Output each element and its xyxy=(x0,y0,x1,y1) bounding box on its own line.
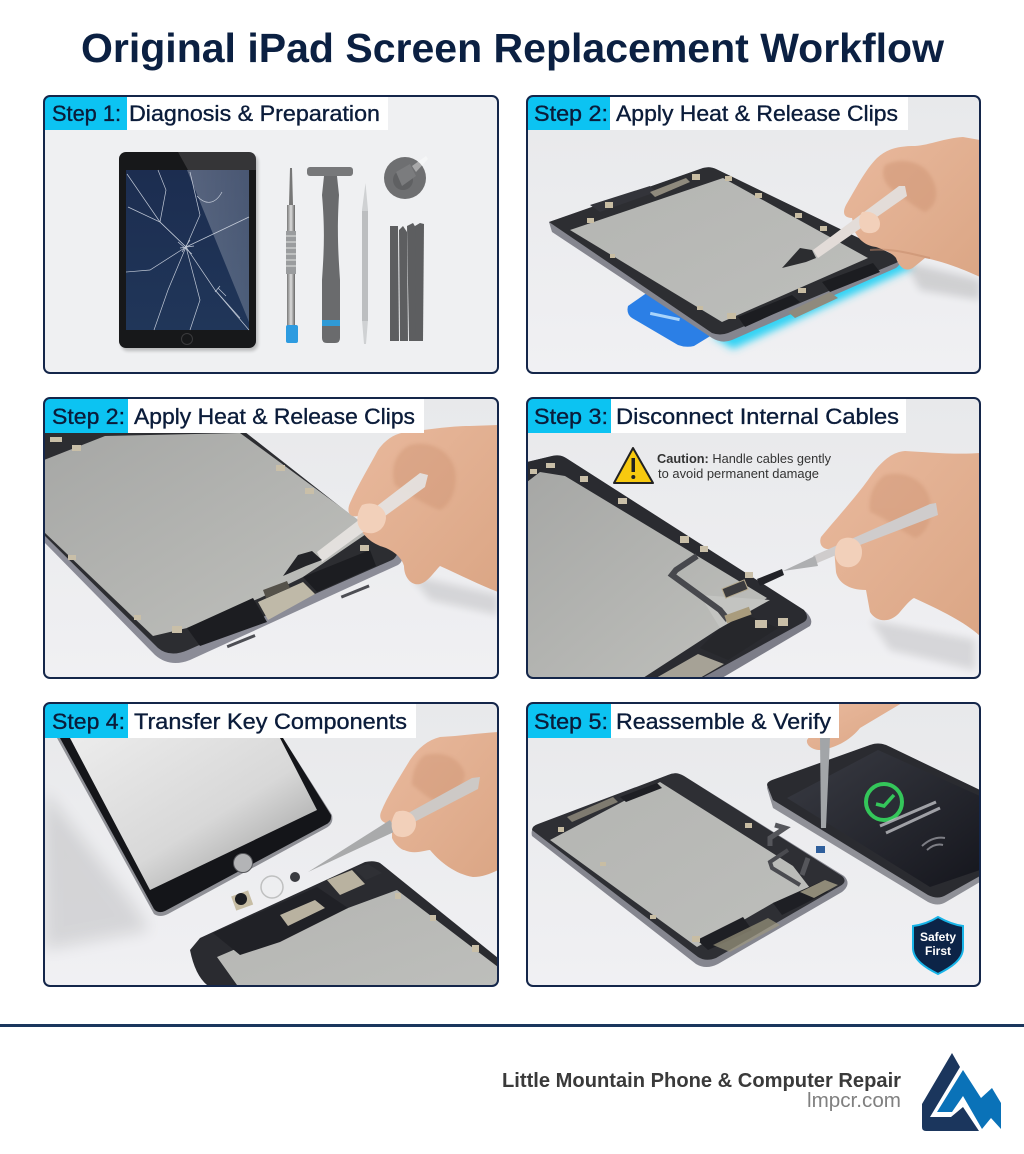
icon: prying picks xyxy=(390,223,424,341)
icon: spudger xyxy=(362,183,368,344)
company name: Little Mountain Phone & Computer Repair xyxy=(502,1070,901,1092)
callout: caution text xyxy=(657,452,832,481)
step label: Step 3: xyxy=(534,404,608,429)
icon: heated opening card xyxy=(628,292,712,347)
step label: Apply Heat & Release Clips xyxy=(134,404,415,429)
step label: Diagnosis & Preparation xyxy=(129,101,380,126)
step label xyxy=(528,399,906,433)
icon: hand with opening tool xyxy=(782,137,980,300)
icon: safety first shield: Safety xyxy=(920,930,956,944)
icon: suction cup xyxy=(384,156,428,199)
step label: Step 4: xyxy=(52,709,125,734)
icon: company logo xyxy=(922,1053,1001,1131)
step label xyxy=(45,399,424,433)
icon: opened tablet with blue glow xyxy=(549,167,912,349)
callout: caution text: to avoid permanent damage xyxy=(658,467,819,481)
icon: safety first shield: First xyxy=(925,944,951,958)
step label xyxy=(528,704,839,738)
icon: t-handle driver xyxy=(307,167,353,343)
panel: step 3 disconnect internal cables xyxy=(527,398,980,678)
step label: Step 2: xyxy=(534,101,608,126)
icon: tablet showing green check xyxy=(767,744,980,904)
icon: hand with tweezers xyxy=(757,451,980,670)
step label: Transfer Key Components xyxy=(134,709,407,734)
callout: caution text: Caution: Handle cables gently xyxy=(657,452,832,466)
icon: detached screen xyxy=(57,738,332,916)
icon: precision screwdriver xyxy=(286,168,298,343)
step label xyxy=(45,97,388,130)
panel: step 1 diagnosis and preparation xyxy=(44,96,498,373)
panel: step 5 reassemble and verify xyxy=(527,703,980,986)
icon: safety first shield xyxy=(913,917,963,974)
icon: caution triangle xyxy=(614,448,653,483)
icon: hand with tweezers xyxy=(308,732,498,877)
icon: hand with screwdriver xyxy=(807,703,902,828)
icon: small components xyxy=(231,872,300,911)
step label: Reassemble & Verify xyxy=(616,709,831,734)
step label: Disconnect Internal Cables xyxy=(616,404,899,429)
icon: hand with opening tool xyxy=(283,425,498,615)
icon: opened tablet with cable xyxy=(527,455,811,678)
step label: Step 5: xyxy=(534,709,608,734)
panel: step 2 apply heat and release clips (close-up) xyxy=(44,398,498,678)
panel: step 4 transfer key components xyxy=(44,703,498,986)
step label: Apply Heat & Release Clips xyxy=(616,101,898,126)
step label xyxy=(45,704,416,738)
title: Original iPad Screen Replacement Workflow xyxy=(81,25,944,71)
icon: cracked tablet xyxy=(119,152,258,351)
icon: repaired tablet interior xyxy=(532,773,848,967)
step label: Step 1: xyxy=(52,101,121,126)
website: lmpcr.com xyxy=(807,1090,901,1112)
icon: tablet body xyxy=(190,861,498,985)
step label xyxy=(528,97,908,130)
icon: tablet close-up xyxy=(44,432,402,663)
panel: step 2 apply heat and release clips (top) xyxy=(527,96,980,373)
step label: Step 2: xyxy=(52,404,125,429)
